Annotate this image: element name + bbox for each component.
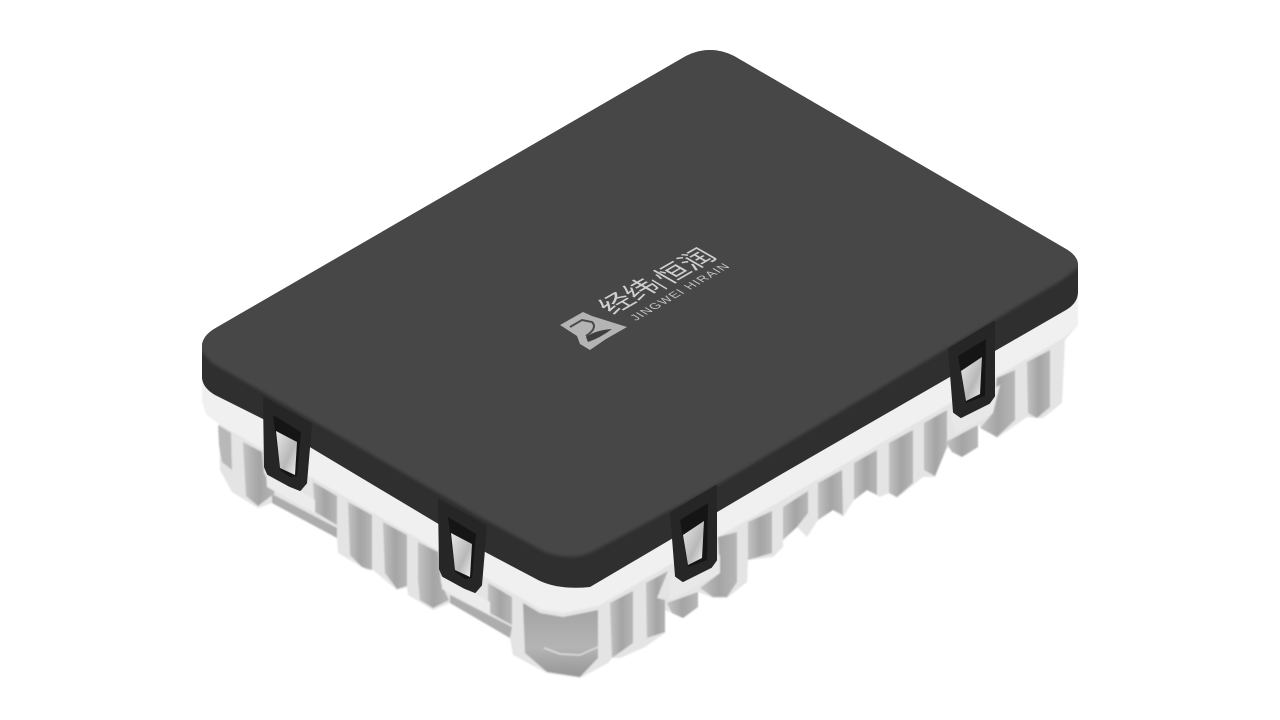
- logo mark: [560, 312, 627, 350]
- clip: front-left 2: [439, 500, 486, 592]
- product illustration: housing with lid: [202, 50, 1078, 678]
- lid top face: [190, 30, 1090, 557]
- rib pockets: front-right side: [610, 350, 1050, 658]
- brand logo on lid: [560, 245, 734, 350]
- lower strips: front-left side: [272, 494, 337, 538]
- divider: [652, 280, 667, 289]
- brand logo on lid: 恒润: [647, 245, 723, 288]
- lid side: [190, 40, 1090, 600]
- lid: [190, 30, 1090, 600]
- brand name in Latin: JINGWEI HIRAIN: [626, 261, 734, 322]
- white rim band: [202, 285, 1078, 613]
- white lower housing with ribs: [202, 285, 1078, 678]
- clip: front-left 1: [264, 398, 311, 490]
- brand name in Chinese: 经纬: [591, 275, 667, 318]
- rib pockets: front-left side: [243, 442, 512, 625]
- corner pocket: [523, 603, 598, 677]
- clip: front-right 2: [949, 322, 994, 417]
- clip: front-right 1: [671, 486, 716, 581]
- clip tabs: [266, 472, 315, 513]
- left corner fin: [218, 425, 232, 470]
